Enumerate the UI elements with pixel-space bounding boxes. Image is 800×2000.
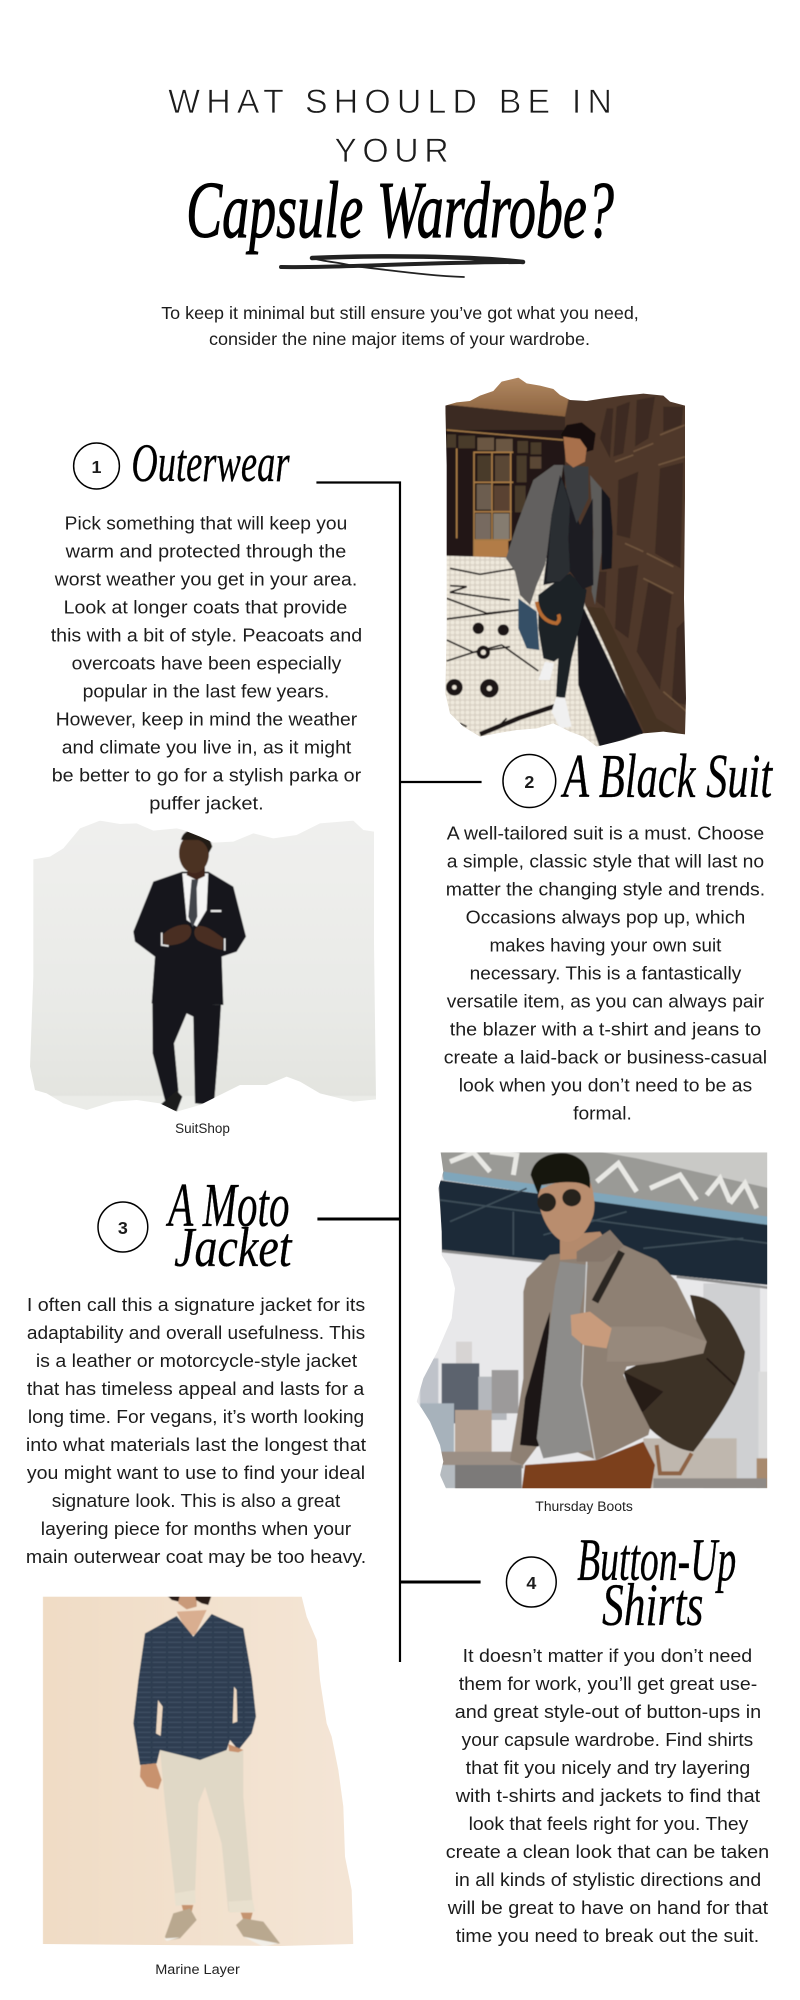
text: a black suit: A well-tailored suit is a must. Choose xyxy=(447,822,764,844)
text: a black suit: versatile item, as you can always pair xyxy=(447,990,764,1012)
photo: man in black suit xyxy=(30,820,376,1112)
text: button-up shirts: It doesn’t matter if you don’t need xyxy=(463,1645,752,1666)
text: button-up shirts: them for work, you’ll get great use- xyxy=(459,1673,757,1694)
text: outerwear: Pick something that will keep you xyxy=(65,512,347,534)
text: a moto jacket: you might want to use to find your ideal xyxy=(27,1462,365,1483)
heading: outerwear: Outerwear xyxy=(131,433,290,493)
text: a moto jacket: adaptability and overall usefulness. This xyxy=(27,1322,365,1343)
text: button-up shirts: look that feels right for you. They xyxy=(469,1813,749,1834)
text: a moto jacket: main outerwear coat may be too heavy. xyxy=(26,1546,366,1567)
intro text xyxy=(161,303,639,349)
heading: button-up shirts xyxy=(506,1527,736,1638)
caption: SuitShop: SuitShop xyxy=(175,1120,230,1136)
heading: a moto jacket: 3 xyxy=(118,1218,128,1238)
text: a black suit: formal. xyxy=(573,1102,632,1124)
heading: button-up shirts: 4 xyxy=(526,1573,536,1593)
text: a black suit: look when you don’t need to be as xyxy=(459,1074,752,1096)
text: button-up shirts: will be great to have on hand for that xyxy=(447,1897,768,1918)
text: button-up shirts xyxy=(446,1645,769,1946)
text: a moto jacket: long time. For vegans, it’s worth looking xyxy=(28,1406,364,1427)
text: button-up shirts: your capsule wardrobe. Find shirts xyxy=(462,1729,753,1750)
brush underline xyxy=(281,256,523,277)
photo: man in overcoat xyxy=(445,378,686,746)
text: a black suit: the blazer with a t-shirt and jeans to xyxy=(450,1018,761,1040)
text: outerwear xyxy=(51,512,362,814)
text: a black suit xyxy=(444,822,767,1124)
text: a moto jacket: is a leather or motorcycle-style jacket xyxy=(36,1350,357,1371)
timeline connector xyxy=(316,482,482,1662)
text: button-up shirts: with t-shirts and jackets to find that xyxy=(455,1785,760,1806)
heading: a moto jacket: Jacket xyxy=(174,1217,293,1279)
text: button-up shirts: create a clean look that can be taken xyxy=(446,1841,769,1862)
text: a black suit: Occasions always pop up, which xyxy=(466,906,745,928)
text: a black suit: necessary. This is a fantastically xyxy=(470,962,742,984)
title: Capsule Wardrobe? xyxy=(186,167,614,255)
photo: man in moto jacket xyxy=(417,1152,768,1488)
text: outerwear: be better to go for a stylish parka or xyxy=(52,764,361,786)
heading: a moto jacket xyxy=(98,1172,293,1279)
heading: outerwear: 1 xyxy=(92,457,102,477)
text: a black suit: matter the changing style and trends. xyxy=(446,878,765,900)
heading: outerwear xyxy=(74,433,290,493)
text: a moto jacket xyxy=(26,1294,366,1567)
text: a black suit: makes having your own suit xyxy=(490,934,721,956)
text: a moto jacket: signature look. This is also a great xyxy=(52,1490,340,1511)
text: a black suit: create a laid-back or business-casual xyxy=(444,1046,767,1068)
text: outerwear: this with a bit of style. Peacoats and xyxy=(51,624,362,646)
title: YOUR xyxy=(334,132,449,170)
photo: man in button-up shirt xyxy=(43,1590,356,1960)
title xyxy=(168,83,614,255)
text: button-up shirts: and great style-out of button-ups in xyxy=(455,1701,761,1722)
intro text: To keep it minimal but still ensure you’ve got what you need, xyxy=(161,303,639,323)
text: a black suit: a simple, classic style that will last no xyxy=(447,850,764,872)
text: outerwear: Look at longer coats that provide xyxy=(64,596,347,618)
intro text: consider the nine major items of your wardrobe. xyxy=(209,329,590,349)
text: outerwear: overcoats have been especially xyxy=(72,652,342,674)
text: outerwear: warm and protected through the xyxy=(65,540,346,562)
text: button-up shirts: that fit you nicely and try layering xyxy=(466,1757,750,1778)
text: a moto jacket: into what materials last the longest that xyxy=(26,1434,366,1455)
text: a moto jacket: that has timeless appeal and lasts for a xyxy=(27,1378,365,1399)
text: a moto jacket: layering piece for months when your xyxy=(41,1518,351,1539)
text: outerwear: However, keep in mind the weather xyxy=(56,708,357,730)
text: button-up shirts: time you need to break out the suit. xyxy=(456,1925,759,1946)
text: outerwear: and climate you live in, as it might xyxy=(62,736,351,758)
title: WHAT SHOULD BE IN xyxy=(168,83,612,121)
heading: a black suit: 2 xyxy=(524,772,534,792)
heading: button-up shirts: Shirts xyxy=(602,1572,703,1638)
text: outerwear: worst weather you get in your area. xyxy=(54,568,357,590)
text: a moto jacket: I often call this a signature jacket for its xyxy=(27,1294,365,1315)
caption: Thursday Boots: Thursday Boots xyxy=(535,1498,633,1514)
heading: a moto jacket: A Moto xyxy=(165,1172,290,1240)
text: button-up shirts: in all kinds of stylistic directions and xyxy=(455,1869,761,1890)
text: outerwear: popular in the last few years. xyxy=(83,680,329,702)
text: outerwear: puffer jacket. xyxy=(149,792,264,814)
caption: Marine Layer: Marine Layer xyxy=(155,1961,240,1977)
